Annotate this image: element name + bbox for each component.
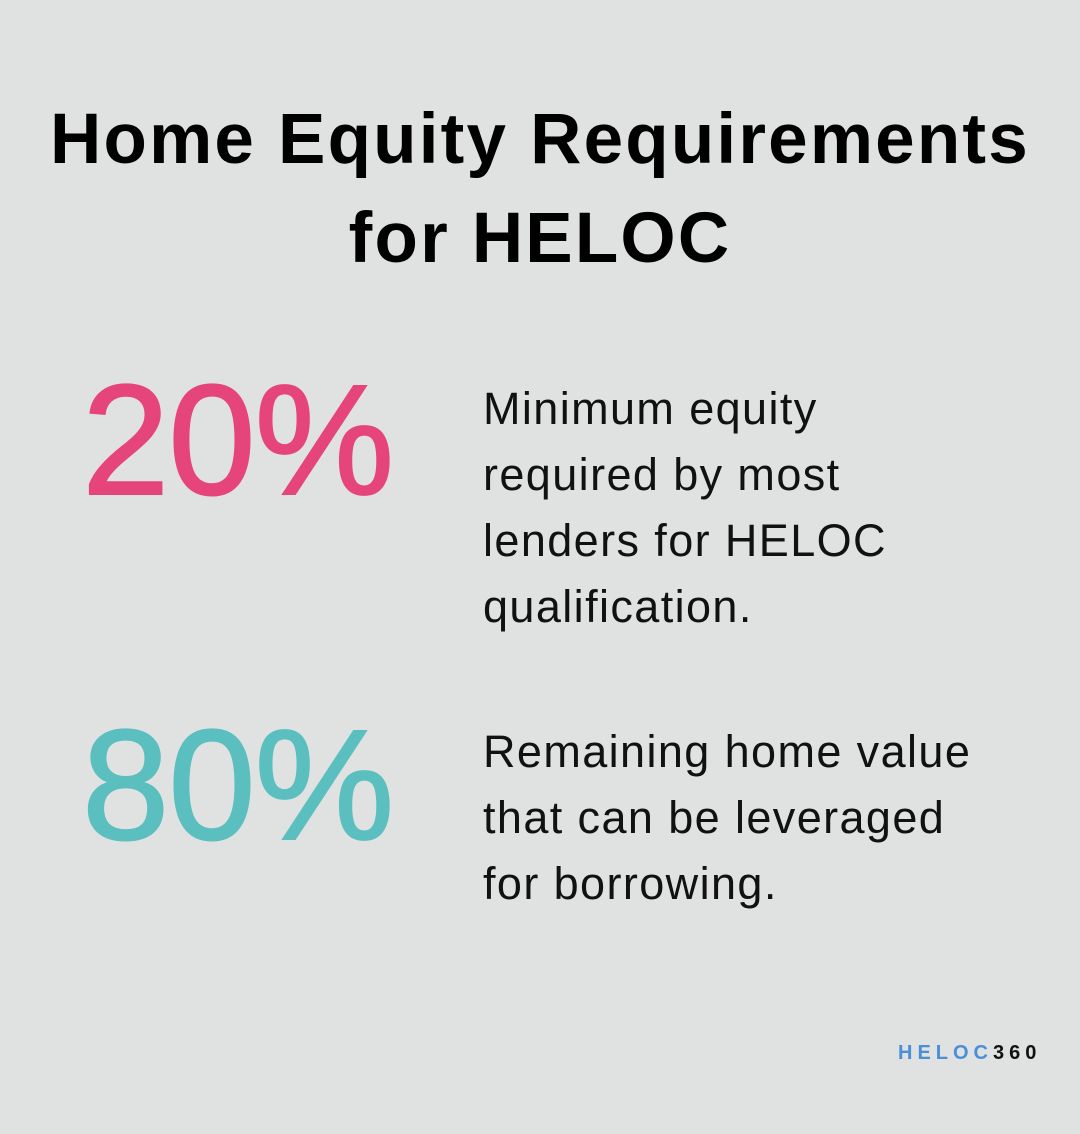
text: 20% description: Minimum equity — [483, 383, 818, 434]
title — [50, 100, 1030, 278]
text: 20% description: lenders for HELOC — [483, 515, 887, 566]
text: 20% description — [483, 383, 887, 632]
logo: HELOC360 — [898, 1042, 1041, 1064]
text: 20% description: required by most — [483, 449, 841, 500]
text: 20% description: qualification. — [483, 581, 753, 632]
title: for HELOC — [349, 199, 731, 278]
text: 80% description: for borrowing. — [483, 858, 778, 909]
stat: 20%: 20% — [82, 353, 393, 528]
text: 80% description: Remaining home value — [483, 726, 971, 777]
stat: 80%: 80% — [82, 698, 393, 873]
title: Home Equity Requirements — [50, 100, 1030, 179]
text: 80% description: that can be leveraged — [483, 792, 945, 843]
text: 80% description — [483, 726, 971, 909]
